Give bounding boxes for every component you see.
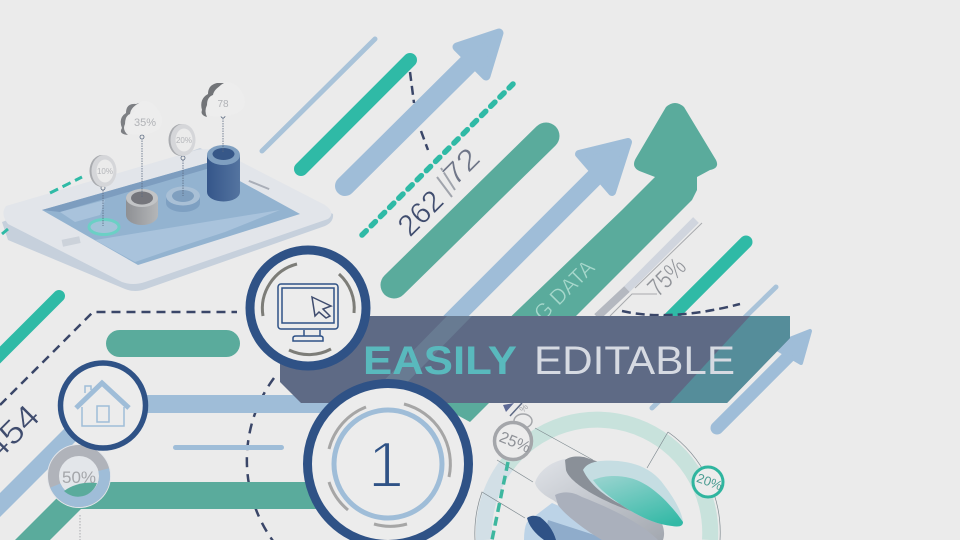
banner heading editable: EDITABLE — [534, 339, 735, 383]
tablet — [2, 145, 333, 291]
50 percent donut — [47, 444, 111, 508]
sphere — [524, 456, 683, 540]
thick green bar — [394, 136, 546, 285]
small teal dash near tablet — [2, 177, 82, 234]
50 percent donut: 50% — [62, 468, 96, 487]
grey cylinder — [126, 189, 158, 225]
navy crescent — [527, 516, 556, 540]
number 262: 262 — [392, 184, 450, 243]
teal dashed stem — [492, 462, 508, 540]
big green arrow — [426, 103, 717, 422]
dashed circle arc — [247, 378, 276, 540]
icon: house — [76, 383, 129, 426]
blue diagonal left — [0, 430, 75, 515]
lower blue body — [524, 503, 640, 540]
dial ring — [475, 420, 720, 540]
dark dashes — [410, 72, 428, 150]
teal ring — [89, 220, 119, 234]
banner heading easily: EASILY — [363, 339, 517, 383]
icon: monitor — [278, 284, 338, 341]
grey arcs — [329, 404, 450, 526]
data pins — [103, 118, 223, 226]
step one badge — [308, 384, 468, 540]
dark grey crescent — [565, 456, 640, 514]
small ring — [514, 414, 532, 428]
20 percent badge: 20% — [695, 470, 725, 493]
teal diagonal bar — [301, 60, 410, 169]
pin ring dots — [101, 114, 225, 190]
dome top — [583, 461, 683, 526]
grey slab — [535, 459, 664, 540]
small bar near banner — [503, 402, 530, 416]
thin blue diagonal line — [262, 39, 375, 151]
teal dashed line — [362, 84, 513, 235]
left teal bar — [0, 296, 59, 365]
blue short cylinder — [166, 186, 200, 212]
number 72: 72 — [437, 142, 487, 192]
grey arcs — [262, 264, 354, 355]
progress bar 75 percent — [597, 220, 702, 317]
disc 10 percent — [90, 155, 116, 187]
cloud 35 percent — [121, 101, 162, 135]
small bar near banner: % — [517, 402, 530, 414]
label on green arrow: G DATA — [529, 255, 600, 326]
monitor badge — [250, 250, 366, 366]
blue arrow right — [717, 331, 810, 428]
inner slab — [555, 492, 658, 540]
house badge — [60, 363, 146, 448]
green pill — [106, 330, 240, 357]
blue arrow top — [345, 33, 499, 186]
cloud 78 percent: 78 — [217, 99, 229, 110]
blue bar from house — [140, 395, 330, 413]
dome teal — [593, 476, 683, 526]
left dashed path — [0, 312, 237, 405]
blue arrow middle — [360, 142, 628, 412]
disc 20 percent — [168, 124, 196, 156]
thin blue line right — [652, 287, 776, 408]
label 75 percent: 75% — [641, 251, 692, 302]
cloud 35 percent: 35% — [134, 117, 156, 129]
number divider — [437, 168, 455, 197]
thin blue bar — [173, 445, 284, 450]
25 percent badge: 25% — [497, 429, 533, 457]
disc 10 percent: 10% — [97, 167, 113, 176]
dark dashed curve right — [622, 304, 740, 315]
navy cylinder — [207, 145, 240, 202]
disc 20 percent: 20% — [176, 136, 192, 145]
dotted stem — [79, 515, 81, 540]
teal bar right — [668, 242, 746, 320]
cloud 78 percent — [201, 82, 245, 117]
step number: 1 — [368, 428, 404, 501]
banner — [280, 316, 790, 403]
green diagonal and thick bar — [15, 482, 324, 540]
